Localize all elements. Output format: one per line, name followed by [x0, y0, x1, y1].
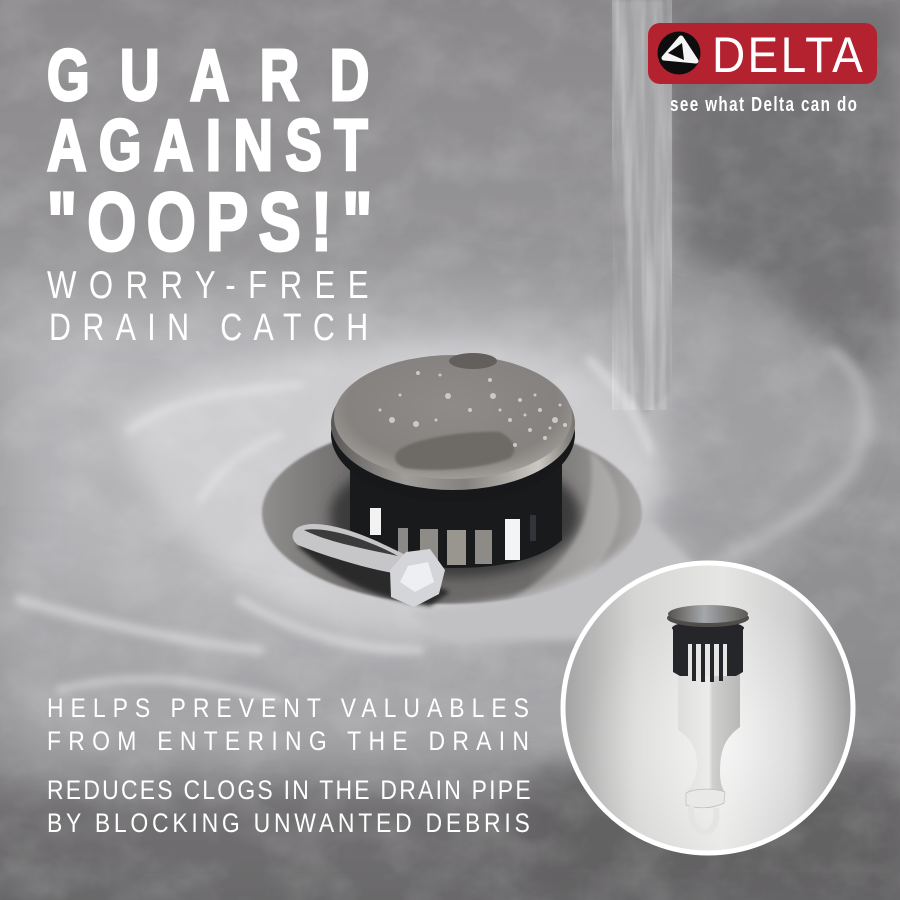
water drop at cap edge: [449, 353, 497, 369]
white stem and hook: [678, 672, 740, 793]
product inset circle: [563, 563, 853, 853]
water over flange: [410, 520, 700, 640]
basket openings: [370, 508, 536, 565]
basket slots: [688, 644, 727, 676]
benefit two line two: BY BLOCKING UNWANTED DEBRIS: [47, 808, 530, 838]
drain catch product: [667, 605, 749, 832]
benefit one line two: FROM ENTERING THE DRAIN: [47, 726, 529, 756]
black basket: [673, 628, 743, 676]
logo red plate: [648, 23, 877, 84]
subhead line two: DRAIN CATCH: [49, 307, 368, 349]
diamond ring: [293, 524, 450, 607]
subhead line one: WORRY-FREE: [47, 264, 369, 307]
hook loop: [691, 806, 716, 832]
diamond: [390, 549, 445, 607]
ring opening: [304, 529, 398, 556]
benefit two line one: REDUCES CLOGS IN THE DRAIN PIPE: [47, 775, 531, 805]
drain flange: [262, 422, 642, 604]
ring band: [293, 524, 412, 575]
circle frame: [563, 563, 853, 853]
dark gasket: [331, 366, 575, 502]
falling water stream: [612, 0, 672, 415]
headline GUARD: GUARD: [47, 35, 369, 116]
mini cap top: [668, 605, 748, 623]
headline AGAINST: AGAINST: [47, 105, 368, 186]
catch basket: [350, 458, 562, 568]
headline OOPS: "OOPS!": [47, 175, 372, 268]
mini cap rim: [667, 609, 749, 627]
Delta logo: [648, 23, 877, 116]
benefit copy: [47, 693, 531, 838]
droplets: [378, 371, 567, 447]
water swirls: [20, 360, 650, 700]
ring shadow: [296, 545, 450, 606]
dark seal: [672, 621, 744, 635]
large water puddle on cap: [395, 432, 514, 470]
cap top: [334, 355, 572, 479]
cap rim: [331, 358, 575, 490]
benefit one line one: HELPS PREVENT VALUABLES: [47, 693, 529, 723]
logo emblem: [658, 32, 700, 74]
shadow inside drain: [330, 453, 580, 577]
logo tagline: see what Delta can do: [670, 93, 857, 116]
drain assembly: [262, 353, 700, 640]
headline: [47, 35, 372, 349]
logo wordmark: DELTA: [712, 28, 863, 83]
hook collar: [686, 789, 725, 808]
circle glow: [565, 565, 851, 851]
dark rib tips: [692, 676, 723, 682]
flange glint: [510, 450, 619, 600]
